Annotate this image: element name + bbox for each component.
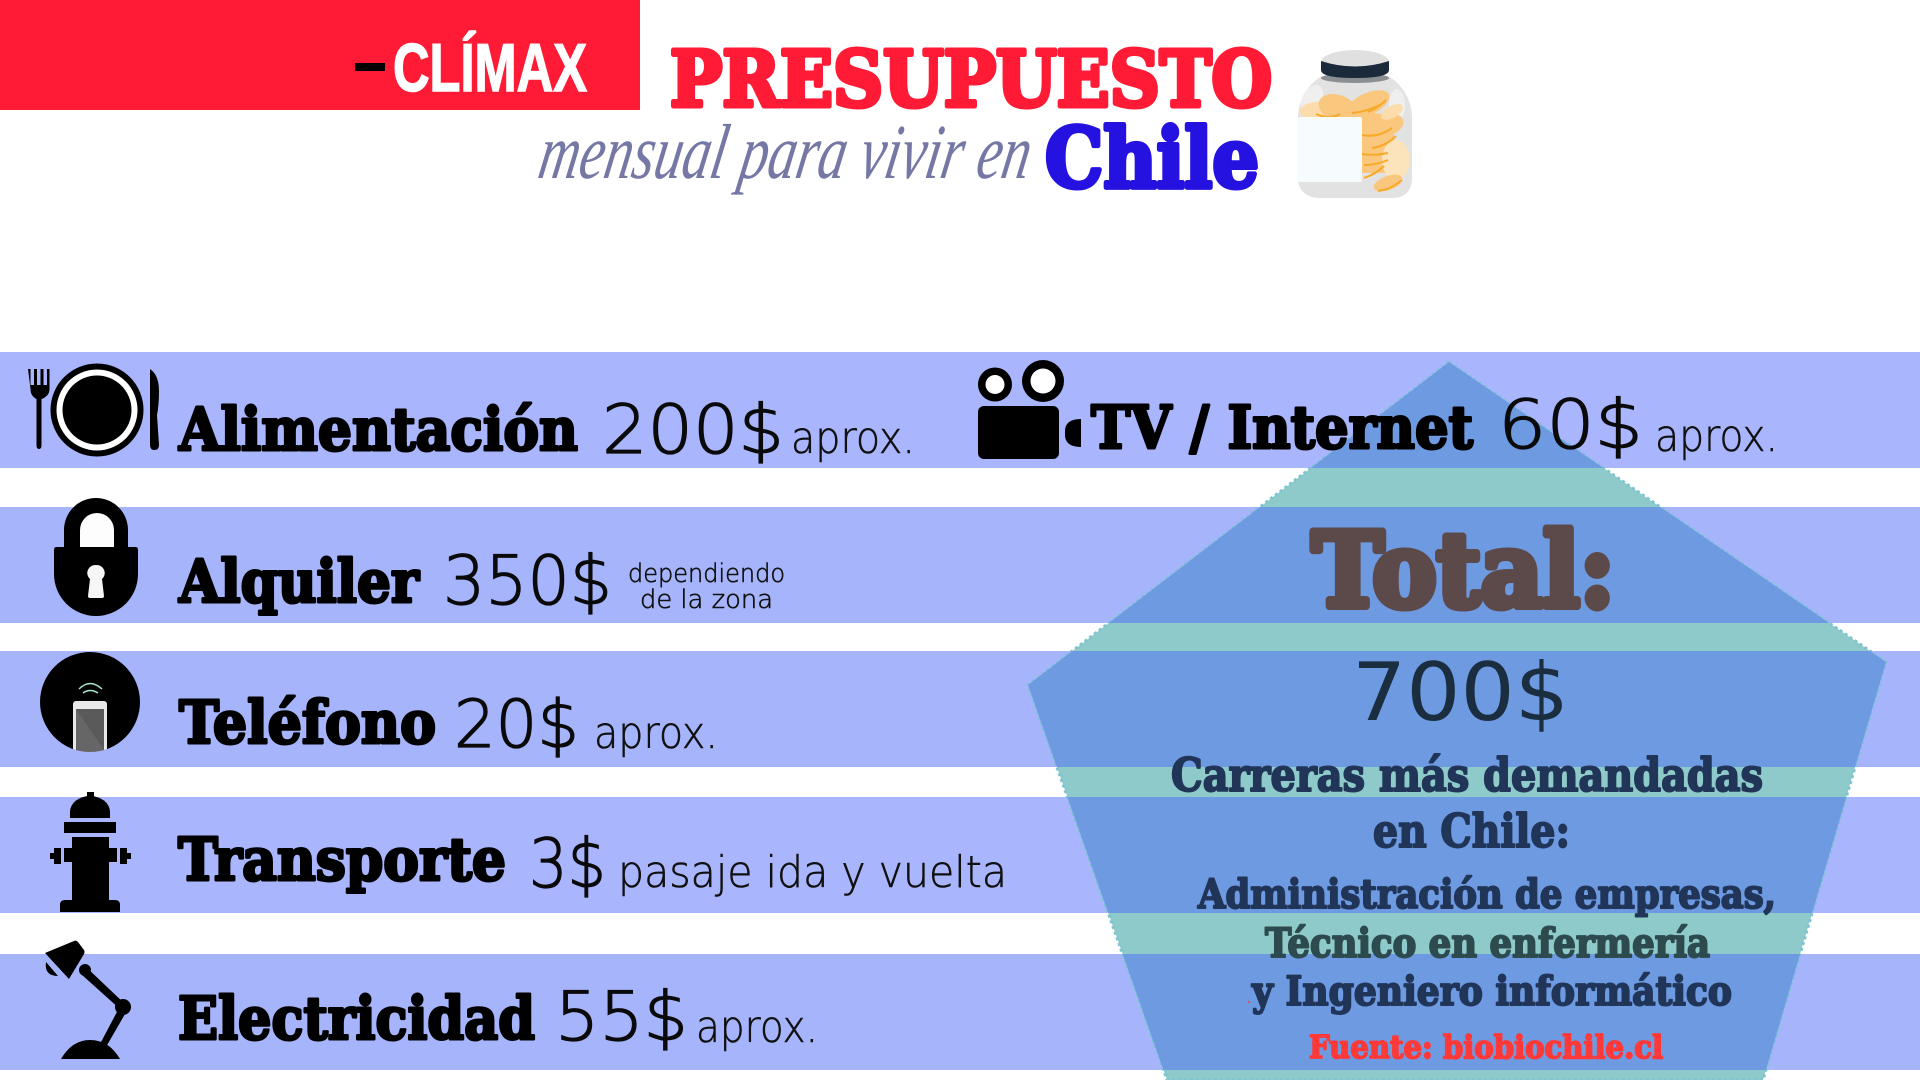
row: Transporte [178,825,1007,904]
panel: total pentagon [1000,352,1920,1080]
row: TV / Internet: aprox. [1655,411,1778,462]
total heading: Total: [1312,511,1615,631]
row: Alimentación: 200$ [602,391,784,470]
row: Alquiler: de la zona [640,585,773,615]
row: TV / Internet [1091,386,1778,465]
row: Alimentación [178,391,915,470]
row: Alimentación: aprox. [791,413,915,464]
text block: in-demand careers: y Ingeniero informático [1251,968,1732,1015]
row: Electricidad: 55$ [555,978,688,1057]
row: Alimentación: Alimentación [178,395,578,464]
row: Teléfono: aprox. [594,708,718,759]
text block: in-demand careers: Técnico en enfermería [1265,920,1710,967]
header banner [0,0,640,110]
icon: desk lamp [45,941,131,1059]
row: Electricidad: Electricidad [178,984,535,1053]
title: Chile [1045,111,1259,207]
row: TV / Internet: TV / Internet [1091,393,1473,462]
icon: film camera [978,360,1081,459]
row: Transporte: Transporte [178,825,506,894]
icon: fork, plate and knife [28,364,159,456]
title: PRESUPUESTO [670,35,1272,125]
header banner: CLÍMAX [393,30,587,106]
text block: in-demand careers: Administración de empresas, [1197,871,1776,918]
text block: in-demand careers: Carreras más demandadas [1171,748,1763,802]
row: Transporte: pasaje ida y vuelta [618,847,1007,898]
source credit: Fuente: biobiochile.cl [1309,1028,1663,1066]
text block: in-demand careers [1171,748,1776,1015]
row: Electricidad: aprox. [696,1002,818,1053]
row: Alquiler: 350$ [443,542,612,621]
row: Alquiler: Alquiler [178,547,420,616]
panel: budget bands [0,352,1920,1070]
row: Teléfono: 20$ [454,686,579,763]
icon: phone in circle [40,652,140,761]
row: Teléfono [179,686,718,763]
icon: fire hydrant [50,792,131,912]
text block: in-demand careers: en Chile: [1373,804,1570,858]
row: Electricidad [178,978,818,1057]
row: Transporte: 3$ [529,825,606,904]
row: TV / Internet: 60$ [1498,386,1643,465]
title [533,35,1272,207]
row: Teléfono: Teléfono [179,688,436,757]
total amount: 700$ [1352,646,1569,739]
row: Alquiler [178,542,785,621]
icon: padlock [54,498,138,616]
title: mensual para vivir en [533,110,1039,196]
row: Alquiler: dependiendo [628,559,785,589]
icon: coin jar [1296,50,1412,198]
